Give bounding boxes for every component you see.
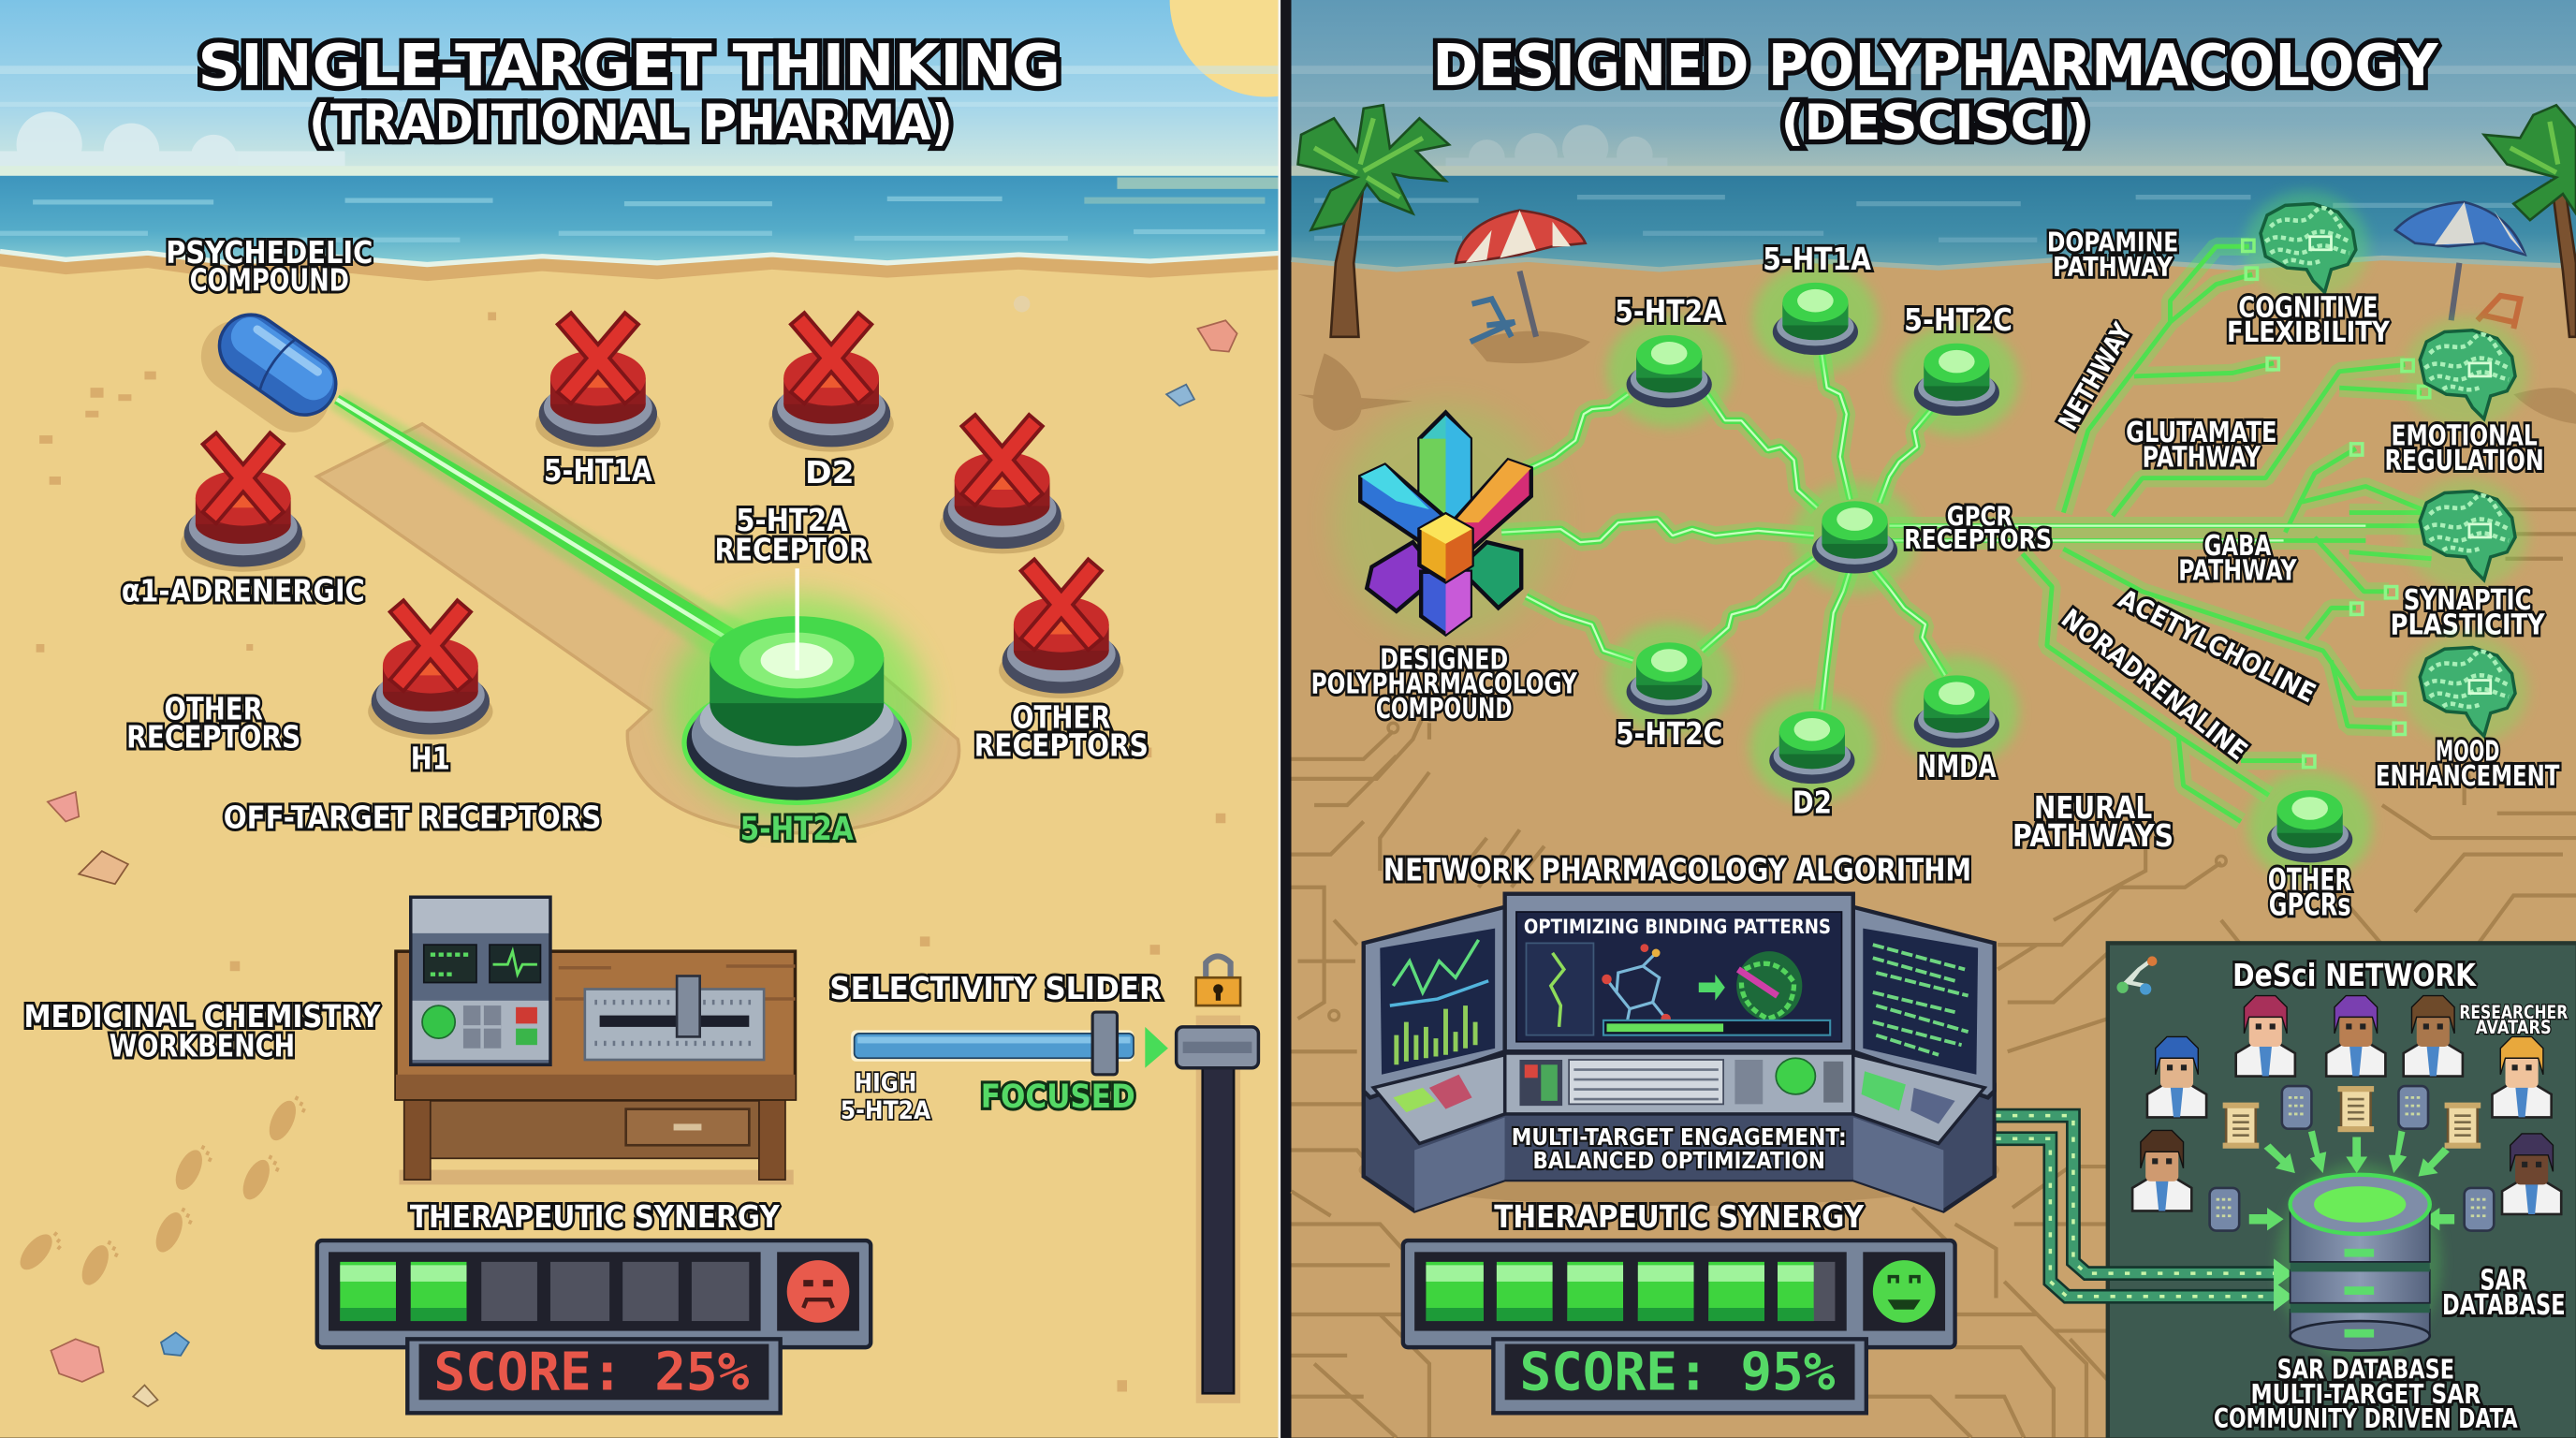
off-target receptor: alpha-1 adrenergic: α1-ADRENERGIC <box>122 572 365 609</box>
brain: synaptic plasticity: PLASTICITY <box>2391 609 2545 641</box>
label: high 5-HT2A <box>841 1069 931 1125</box>
vertical locked slider <box>1177 1016 1258 1403</box>
heading: DeSci network: DeSci NETWORK <box>2232 957 2477 993</box>
label: other receptors left: RECEPTORS <box>126 719 300 756</box>
umbrella blue <box>2395 202 2525 329</box>
score: 25 percent <box>407 1339 781 1413</box>
receptor: 5-HT2A: 5-HT2A <box>1615 293 1723 330</box>
receptor: GPCR hub <box>1793 481 2052 594</box>
icon: SAR database cylinder <box>2277 1164 2441 1360</box>
selectivity slider control <box>851 1012 1168 1075</box>
label: multi-target engagement: MULTI-TARGET ENGAGEMENT: <box>1512 1123 1847 1151</box>
data flow glowing network <box>1501 240 2438 822</box>
receptor: other GPCRs: OTHER <box>2268 861 2351 898</box>
label: high 5-HT2A: HIGH <box>855 1069 916 1097</box>
label: multi-target engagement: BALANCED OPTIMIZATION <box>1533 1147 1825 1174</box>
receptor: 5-HT2C lower <box>1606 623 1732 752</box>
shadow trail under the beam <box>317 424 959 833</box>
brain: emotional regulation <box>2385 317 2544 477</box>
label: designed polypharmacology compound: COMPOUND <box>1376 693 1513 726</box>
panel: single-target thinking <box>0 0 1364 1438</box>
label: multi-target engagement <box>1512 1123 1847 1174</box>
receptor: other GPCRs <box>2247 770 2372 923</box>
label: gaba pathway: PATHWAY <box>2178 555 2297 588</box>
label: designed polypharmacology compound <box>1311 643 1577 726</box>
title: designed polypharmacology <box>1432 33 2439 152</box>
umbrella red <box>1456 211 1586 342</box>
label: medicinal chemistry workbench: WORKBENCH <box>110 1027 295 1064</box>
off-target receptor: 5-HT1A <box>535 325 661 489</box>
synergy meter: 95 percent <box>1403 1240 1955 1347</box>
label: SAR database caption <box>2214 1354 2518 1434</box>
label: 5-HT2A receptor <box>714 502 869 567</box>
synergy meter: 25 percent <box>317 1240 871 1347</box>
icon: psychedelic compound capsule <box>187 297 351 447</box>
label: gaba pathway: GABA <box>2203 530 2271 563</box>
title: designed polypharmacology: (DESCISCI) <box>1781 95 2089 152</box>
brain: cognitive flexibility: COGNITIVE <box>2238 292 2378 325</box>
title: single-target thinking: SINGLE-TARGET THINKING <box>198 33 1061 99</box>
side decks <box>1373 1055 1984 1143</box>
receptor: 5-HT1A: 5-HT1A <box>1763 241 1871 277</box>
title: designed polypharmacology: DESIGNED POLYPHARMACOLOGY <box>1432 33 2439 99</box>
label: SAR database <box>2442 1265 2566 1322</box>
off-target receptor: unlabelled right <box>940 427 1064 553</box>
receptor: 5-HT1A <box>1753 241 1878 374</box>
label: network pharmacology algorithm: NETWORK PHARMACOLOGY ALGORITHM <box>1383 852 1971 888</box>
receptor: other GPCRs: GPCRs <box>2269 887 2351 923</box>
brain: mood enhancement <box>2376 634 2560 793</box>
label: other receptors left <box>126 691 300 756</box>
researcher avatars <box>2132 996 2561 1214</box>
score: 25 percent: SCORE: 25% <box>433 1343 750 1403</box>
receptor: NMDA <box>1895 655 2019 785</box>
receptor: 5-HT2C top <box>1895 301 2019 435</box>
label: glutamate pathway <box>2126 417 2277 474</box>
label: psychedelic compound: PSYCHEDELIC <box>166 234 373 271</box>
label: dopamine pathway: PATHWAY <box>2053 252 2174 283</box>
network: receptor connections <box>1501 355 1945 710</box>
label: selectivity slider: SELECTIVITY SLIDER <box>829 970 1162 1006</box>
label: SAR database caption: MULTI-TARGET SAR <box>2250 1379 2481 1410</box>
label: psychedelic compound: COMPOUND <box>190 262 349 299</box>
icon: sad face <box>787 1260 849 1323</box>
network pharmacology computer console <box>1358 894 1999 1211</box>
keyboard deck <box>1505 1053 1853 1114</box>
label: therapeutic synergy left: THERAPEUTIC SYNERGY <box>410 1198 781 1235</box>
background: sky, sea and sand <box>1292 0 2576 1438</box>
receptor: D2: D2 <box>1793 785 1832 821</box>
label: therapeutic synergy right: THERAPEUTIC SYNERGY <box>1494 1198 1865 1235</box>
receptor: D2 <box>1749 692 1875 821</box>
label: neural pathways <box>2012 789 2174 854</box>
receptor: 5-HT2C lower: 5-HT2C <box>1616 715 1722 752</box>
label: focused: FOCUSED <box>981 1078 1135 1116</box>
receptor: GPCR hub: GPCR <box>1947 502 2012 533</box>
arrow: green targeting beam <box>329 391 748 661</box>
off-target receptor: H1: H1 <box>411 740 450 776</box>
label: 5-HT2A receptor: RECEPTOR <box>714 531 869 567</box>
score: 95 percent: SCORE: 95% <box>1519 1343 1836 1403</box>
icon: 5-HT2A target button <box>668 568 925 818</box>
score: 95 percent <box>1493 1339 1866 1413</box>
brain: synaptic plasticity: SYNAPTIC <box>2404 584 2532 617</box>
off-target receptor: H1 <box>368 613 493 776</box>
label: noradrenaline: NORADRENALINE <box>2056 603 2253 767</box>
off-target receptor: other receptors right: RECEPTORS <box>974 726 1149 763</box>
instrument console <box>411 897 550 1064</box>
label: dopamine pathway <box>2047 227 2178 283</box>
label: high 5-HT2A: 5-HT2A <box>841 1097 931 1125</box>
receptor: 5-HT2A <box>1606 293 1732 427</box>
background: sky, sun, sea and sand <box>0 0 1364 1438</box>
panel: designed polypharmacology <box>1292 0 2576 1438</box>
off-target receptor: 5-HT1A: 5-HT1A <box>544 452 652 489</box>
data cables to database <box>1996 1116 2293 1312</box>
center monitor <box>1505 894 1853 1051</box>
label: neural pathways: PATHWAYS <box>2012 817 2174 854</box>
brain: emotional regulation: EMOTIONAL <box>2392 420 2538 453</box>
title: single-target thinking <box>198 33 1061 152</box>
receptor: 5-HT2C top: 5-HT2C <box>1904 301 2012 338</box>
off-target receptor: other receptors right <box>974 572 1149 763</box>
icon: happy face <box>1873 1260 1936 1323</box>
label: netway: NETHWAY <box>2052 317 2138 435</box>
receptor: NMDA: NMDA <box>1917 748 1997 785</box>
label: researcher avatars: AVATARS <box>2476 1017 2552 1038</box>
brain: synaptic plasticity <box>2391 478 2545 641</box>
workbench illustration <box>396 897 795 1184</box>
icon: network molecule <box>2116 956 2157 995</box>
label: designed polypharmacology compound: DESIGNED <box>1380 643 1508 676</box>
label: off-target receptors: OFF-TARGET RECEPTORS <box>224 800 601 836</box>
arrows into the database <box>2249 1130 2454 1231</box>
brain: mood enhancement: MOOD <box>2436 736 2499 769</box>
divider between panels <box>1278 0 1292 1438</box>
off-target receptor: D2: D2 <box>805 454 855 491</box>
label: designed polypharmacology compound: POLYPHARMACOLOGY <box>1311 668 1577 701</box>
icon: designed polypharmacology crystal compound <box>1334 404 1558 640</box>
label: medicinal chemistry workbench <box>23 998 381 1064</box>
brain: cognitive flexibility <box>2227 191 2390 349</box>
label: gaba pathway <box>2178 530 2297 588</box>
off-target receptor: other receptors right: OTHER <box>1012 698 1110 735</box>
off-target receptor: alpha-1 adrenergic <box>122 446 365 609</box>
label: neural pathways: NEURAL <box>2034 789 2152 826</box>
palm right <box>2484 105 2576 337</box>
label: acetylcholine: ACETYLCHOLINE <box>2114 583 2320 709</box>
off-target receptor: D2 <box>768 325 894 491</box>
label: dopamine pathway: DOPAMINE <box>2047 227 2178 258</box>
center monitor: OPTIMIZING BINDING PATTERNS <box>1524 915 1831 938</box>
label: psychedelic compound <box>166 234 373 299</box>
slider instrument <box>585 976 764 1060</box>
label: medicinal chemistry workbench: MEDICINAL CHEMISTRY <box>23 998 381 1034</box>
data scrolls and records <box>2210 1086 2494 1231</box>
label: SAR database: SAR <box>2480 1265 2527 1298</box>
panel: DeSci network <box>1996 943 2576 1438</box>
title: single-target thinking: (TRADITIONAL PHARMA) <box>309 95 953 152</box>
beach decorations: shells, pebbles and footprints <box>14 296 1237 1406</box>
receptor: GPCR hub: RECEPTORS <box>1904 524 2052 555</box>
network: neural pathways <box>1889 240 2438 822</box>
right monitor <box>1853 907 1995 1097</box>
beach scenery: palms, umbrellas and chairs <box>1298 105 2576 431</box>
label: researcher avatars <box>2459 1002 2568 1038</box>
label: glutamate pathway: PATHWAY <box>2143 441 2261 474</box>
icon: padlock <box>1196 956 1240 1005</box>
palm left <box>1298 105 1449 337</box>
label: other receptors left: OTHER <box>165 691 263 727</box>
label: 5-HT2A green: 5-HT2A <box>740 810 854 848</box>
brain: cognitive flexibility: FLEXIBILITY <box>2227 316 2390 349</box>
label: 5-HT2A receptor: 5-HT2A <box>736 502 848 538</box>
left monitor <box>1364 907 1505 1097</box>
label: SAR database caption: SAR DATABASE <box>2277 1354 2454 1385</box>
label: glutamate pathway: GLUTAMATE <box>2126 417 2277 449</box>
circuit board traces on the sand <box>1292 509 2576 1438</box>
